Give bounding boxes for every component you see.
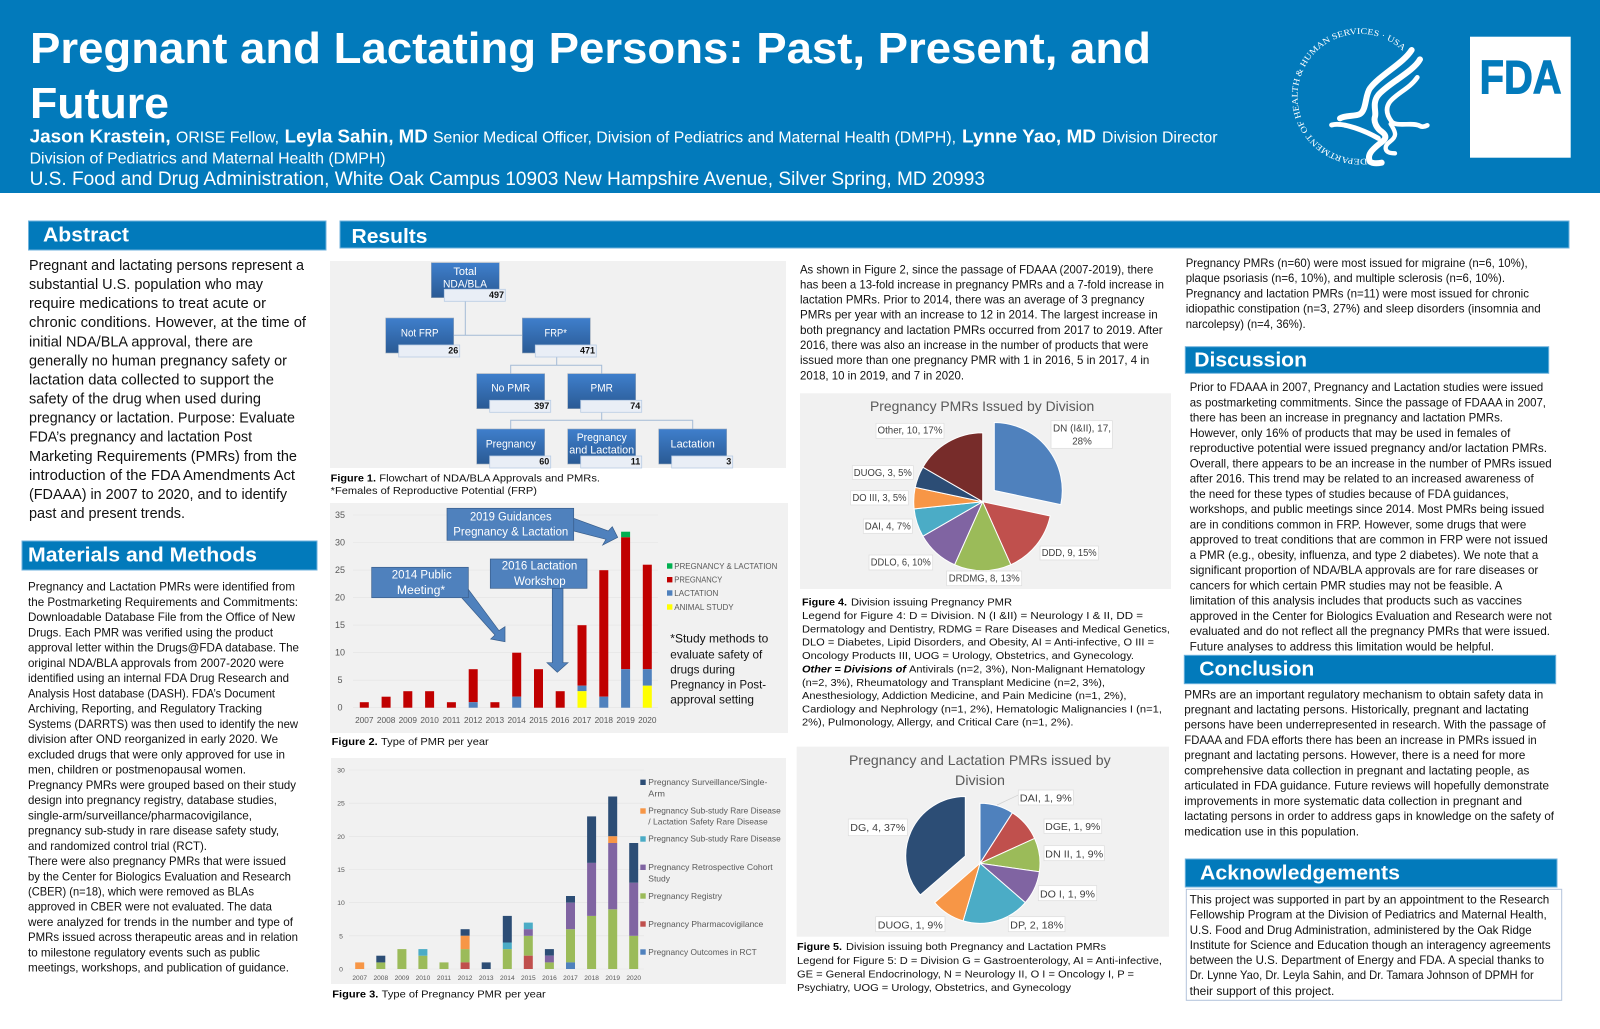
text block: results continued: Pregnancy and lactation PMRs (n=11) were most issued for chronic: [1186, 287, 1529, 300]
text block: discussion: Future analyses to address this limitation would be helpful.: [1190, 640, 1494, 653]
note: study methods: approval setting: [670, 692, 754, 706]
x axis year labels: 2009: [399, 715, 417, 725]
text block: acknowledgements: This project was supported in part by an appointment to the Research: [1190, 893, 1549, 906]
heading: Abstract: Abstract: [43, 225, 129, 247]
node: PMR 74: [568, 374, 642, 412]
authors and affiliations: U.S. Food and Drug Administration, White Oak Campus 10903 New Hampshire Avenue, Silver Spring, MD 20993: [30, 168, 985, 190]
y axis labels: 0: [339, 966, 343, 974]
node: Total NDA/BLA 497: NDA/BLA: [443, 279, 488, 291]
heading: Conclusion: Conclusion: [1199, 659, 1314, 681]
text block: materials and methods: (CBER) (n=18), which were removed as BLAs: [28, 886, 254, 898]
y axis labels: 25: [337, 801, 345, 808]
text block: abstract: require medications to treat acute or: [29, 295, 266, 312]
text block: results narrative: has been a 13-fold increase in pregnancy PMRs and a 7-fold increase in: [800, 278, 1164, 291]
note: study methods: *Study methods to: [670, 632, 769, 646]
x axis year labels: 2020: [626, 975, 641, 982]
heading: Materials and Methods: [22, 541, 317, 570]
caption: figure 4: Division issuing Pregnancy PMR: [851, 596, 1012, 608]
y axis labels: 15: [335, 620, 345, 630]
caption: figure 5: Figure 5.: [797, 941, 842, 953]
text block: results narrative: issued more than one pregnancy PMR with 1 in 2016, 5 in 2017, 4 in: [800, 354, 1149, 367]
text block: abstract: generally no human pregnancy safety or: [29, 352, 287, 369]
caption: figure 4: Anesthesiology, Addiction Medicine, and Pain Medicine (n=1, 2%),: [802, 690, 1126, 702]
text block: materials and methods: Archiving, Reporting, and Regulatory Tracking: [28, 703, 262, 716]
caption: figure 1: *Females of Reproductive Potential (FRP): [331, 485, 537, 497]
node: Not FRP 26: 26: [448, 346, 458, 356]
text block: materials and methods: meetings, workshops, and publication of guidance.: [28, 962, 289, 975]
authors and affiliations: Division of Pediatrics and Maternal Health (DMPH): [30, 150, 386, 167]
text block: conclusion: comprehensive data collection in pregnant and lactating people, as: [1184, 764, 1530, 777]
text block: discussion: reproductive potential were issued pregnancy and/or lactation PMRs.: [1190, 442, 1547, 455]
data labels: DAI, 4, 7%: [865, 522, 911, 533]
node: Pregnancy and Lactation 11: 11: [631, 457, 640, 467]
text block: acknowledgements: between the U.S. Department of Energy and FDA. A special thanks to: [1190, 954, 1544, 967]
x axis year labels: 2012: [464, 715, 483, 725]
callout: 2016 lactation workshop with arrow: Workshop: [514, 574, 566, 588]
text block: materials and methods: Pregnancy and Lactation PMRs were identified from: [28, 581, 295, 594]
legend: figure 2: [667, 561, 777, 612]
x axis year labels: 2011: [442, 715, 461, 725]
x axis year labels: 2008: [373, 975, 388, 982]
node: Lactation 3: Lactation: [671, 439, 715, 451]
data labels: DG, 4, 37%: [850, 823, 906, 834]
text block: discussion: workshops, and public meetings since 2014. Most PMRs being issued: [1189, 503, 1544, 516]
heading: Materials and Methods: Materials and Methods: [28, 545, 257, 567]
chart title: Division: [955, 772, 1005, 788]
text block: discussion: approved to treat conditions that are common in FRP were not issued: [1190, 534, 1548, 546]
node: PMR 74: PMR: [591, 383, 613, 395]
text block: results continued: plaque psoriasis (n=6, 10%), and multiple sclerosis (n=6, 10%).: [1186, 272, 1505, 285]
x axis year labels: 2011: [437, 975, 451, 982]
callout: 2016 lactation workshop with arrow: [490, 559, 587, 672]
caption: figure 4: Cardiology and Nephrology (n=1, 2%), Hematologic Malignancies I (n=1,: [802, 704, 1162, 716]
x axis year labels: 2012: [458, 975, 473, 982]
x axis year labels: 2014: [507, 715, 526, 725]
text block: conclusion: pregnant and lactating persons. Historically, pregnant and lactating: [1184, 704, 1529, 716]
text block: discussion: approved in the Center for Biologics Evaluation and Research were not: [1190, 610, 1552, 623]
callout: 2019 guidances with arrow: 2019 Guidances: [470, 510, 552, 524]
text block: acknowledgements: Institute for Science and Education though an interagency agreements: [1190, 939, 1551, 952]
caption: figure 4: (n=2, 3%), Rheumatology and Transplant Medicine (n=2, 3%),: [802, 677, 1105, 689]
node: Pregnancy 60: 60: [539, 457, 549, 467]
data labels: 28%: [1072, 436, 1092, 447]
x axis year labels: 2010: [420, 715, 439, 725]
x axis year labels: 2007: [355, 715, 374, 725]
x axis year labels: 2013: [486, 715, 505, 725]
node: Lactation 3: 3: [726, 457, 731, 467]
node: Total NDA/BLA 497: [431, 263, 505, 301]
text block: materials and methods: Systems (DARRTS) was then used to identify the new: [28, 718, 299, 731]
text block: materials and methods: approval letter within the Drugs@FDA database. The: [28, 642, 299, 655]
node: Pregnancy and Lactation 11: Pregnancy: [577, 432, 627, 444]
text block: abstract: lactation data collected to support the: [29, 372, 274, 388]
legend: figure 2: ANIMAL STUDY: [674, 602, 734, 612]
caption: figure 3: Figure 3.: [332, 989, 378, 1001]
data labels: [851, 421, 1112, 586]
text block: abstract: Marketing Requirements (PMRs) from the: [29, 448, 297, 465]
callout: 2014 public meeting with arrow: [372, 567, 505, 642]
title: Future: [30, 79, 169, 128]
legend: figure 3: Pregnancy Outcomes in RCT: [648, 947, 757, 957]
text block: abstract: FDA’s pregnancy and lactation Post: [29, 429, 253, 446]
text block: discussion: significant proportion of NDA/BLA approvals are for rare diseases or: [1190, 564, 1538, 577]
text block: materials and methods: [27, 581, 299, 975]
authors and affiliations: ORISE Fellow,: [176, 130, 279, 147]
text block: results continued: Pregnancy PMRs (n=60) were most issued for migraine (n=6, 10%),: [1186, 257, 1528, 270]
node: PMR 74: 74: [630, 401, 640, 411]
text block: discussion: as postmarketing commitments. Since the passage of FDAAA in 2007,: [1190, 396, 1546, 409]
node: Pregnancy and Lactation 11: [568, 429, 642, 468]
heading: Conclusion: [1184, 655, 1556, 684]
node: Pregnancy 60: [477, 429, 551, 468]
node: Pregnancy 60: Pregnancy: [486, 439, 536, 451]
text block: results narrative: both pregnancy and lactation PMRs occurred from 2017 to 2019. After: [800, 324, 1163, 337]
text block: conclusion: articulated in FDA guidance. Future reviews will hopefully demonstrate: [1184, 780, 1549, 793]
x axis year labels: 2009: [395, 975, 410, 982]
text block: materials and methods: original NDA/BLA approvals from 2007-2020 were: [28, 657, 284, 670]
text block: acknowledgements: [1186, 889, 1562, 1000]
icon: FDA logo: [1470, 37, 1571, 158]
authors and affiliations: Division Director: [1102, 130, 1218, 147]
text block: abstract: [29, 257, 307, 522]
caption: figure 4: Other = Divisions of: [802, 663, 908, 675]
y axis labels: 35: [335, 510, 345, 520]
x axis year labels: 2020: [638, 715, 657, 725]
authors and affiliations: Leyla Sahin, MD: [285, 127, 428, 147]
text block: results continued: narcolepsy) (n=4, 36%).: [1186, 318, 1306, 331]
icon: FDA logo: FDA: [1480, 51, 1562, 104]
text block: results narrative: lactation PMRs. Prior to 2014, there was an average of 3 pregnancy: [800, 294, 1144, 307]
data labels: DUOG, 3, 5%: [854, 468, 912, 479]
caption: figure 2: Figure 2.: [332, 736, 378, 748]
callout: 2019 guidances with arrow: Pregnancy & Lactation: [453, 525, 568, 539]
text block: results narrative: 2016, there was also an increase in the number of products that were: [800, 339, 1148, 352]
caption: figure 4: Legend for Figure 4: D = Division. N (I &II) = Neurology I & II, DD =: [802, 610, 1143, 622]
heading: Discussion: [1185, 347, 1549, 373]
title: [30, 24, 1151, 128]
x axis year labels: 2016: [551, 715, 570, 725]
text block: materials and methods: design into pregnancy registry, database studies,: [28, 794, 277, 807]
data labels: DN (I&II), 17,: [1053, 424, 1111, 435]
x axis year labels: 2014: [500, 975, 515, 982]
text block: acknowledgements: Dr. Lynne Yao, Dr. Leyla Sahin, and Dr. Tamara Johnson of DPMH for: [1190, 969, 1534, 982]
panel: figure 3 stacked bar chart: [331, 758, 786, 984]
x axis year labels: 2015: [529, 715, 548, 725]
text block: materials and methods: the Postmarketing Requirements and Commitments:: [28, 596, 298, 609]
node: Total NDA/BLA 497: 497: [489, 290, 504, 300]
y axis labels: 20: [335, 593, 345, 603]
text block: discussion: [1189, 381, 1552, 653]
caption: figure 1: [331, 473, 600, 497]
legend: figure 3: Arm: [648, 789, 665, 799]
caption: figure 2: [332, 736, 489, 748]
text block: materials and methods: to milestone regulatory events such as public: [28, 946, 260, 960]
node: FRP 471: [522, 318, 596, 357]
data labels: DRDMG, 8, 13%: [949, 574, 1020, 585]
note: study methods: evaluate safety of: [670, 648, 763, 662]
text block: discussion: after 2016. This trend may be related to an increased awareness of: [1190, 472, 1534, 486]
text block: materials and methods: Drugs. Each PMR was verified using the product: [28, 626, 274, 639]
text block: results narrative: As shown in Figure 2, since the passage of FDAAA (2007-2019), there: [800, 263, 1153, 276]
caption: figure 1: Flowchart of NDA/BLA Approvals and PMRs.: [379, 473, 600, 485]
node: Not FRP 26: [386, 318, 460, 357]
text block: materials and methods: excluded drugs that were only approved for use in: [28, 748, 285, 761]
heading: Acknowledgements: Acknowledgements: [1200, 862, 1400, 884]
x axis year labels: [352, 975, 641, 982]
heading: Abstract: [28, 221, 326, 250]
y axis labels: 25: [335, 565, 345, 575]
text block: materials and methods: identified using an internal FDA Drug Research and: [28, 672, 289, 685]
text block: acknowledgements: U.S. Food and Drug Administration, administered by the Oak Ridge: [1190, 924, 1532, 937]
caption: figure 4: DLO = Diabetes, Lipid Disorders, and Obesity, AI = Anti-infective, O III =: [802, 637, 1154, 649]
caption: figure 5: Division issuing both Pregnancy and Lactation PMRs: [846, 941, 1106, 953]
legend: figure 3: Pregnancy Registry: [648, 891, 723, 901]
chart title: [849, 752, 1111, 788]
text block: discussion: the need for these types of studies because of FDA guidances,: [1190, 488, 1509, 501]
text block: materials and methods: men, children or postmenopausal women.: [28, 764, 246, 777]
callout: 2019 guidances with arrow: [447, 508, 618, 545]
note: study methods: Pregnancy in Post-: [670, 678, 766, 692]
data labels: DAI, 1, 9%: [1020, 794, 1072, 805]
text block: materials and methods: Downloadable Database File from the Office of New: [28, 611, 296, 624]
y axis labels: 10: [335, 648, 345, 658]
x axis year labels: 2013: [479, 975, 494, 982]
text block: discussion: Prior to FDAAA in 2007, Pregnancy and Lactation studies were issued: [1190, 381, 1543, 394]
callout: 2014 public meeting with arrow: Meeting*: [397, 583, 445, 597]
pie slices: [906, 796, 1040, 923]
text block: discussion: limitation of this analysis includes that products such as vaccines: [1190, 594, 1522, 608]
chart title: Pregnancy PMRs Issued by Division: [870, 398, 1094, 414]
y axis labels: 15: [337, 867, 345, 874]
text block: results continued: [1186, 257, 1541, 331]
legend: figure 3: Pregnancy Retrospective Cohort: [648, 862, 773, 872]
data labels: DDD, 9, 15%: [1042, 548, 1097, 559]
data labels: [848, 790, 1104, 932]
x axis year labels: 2019: [616, 715, 635, 725]
text block: results narrative: PMRs per year with an increase to 12 in 2014. The largest increase in: [800, 309, 1158, 322]
y axis labels: 30: [337, 768, 345, 774]
callout: 2016 lactation workshop with arrow: 2016 Lactation: [502, 559, 577, 573]
caption: figure 3: Type of Pregnancy PMR per year: [382, 989, 546, 1001]
text block: results continued: idiopathic constipation (n=3, 27%) and sleep disorders (insomnia and: [1186, 303, 1541, 316]
legend: figure 3: Pregnancy Sub-study Rare Disease: [648, 806, 781, 816]
caption: figure 4: 2%), Pulmonology, Allergy, and Critical Care (n=1, 2%).: [802, 716, 1074, 728]
node: Pregnancy and Lactation 11: and Lactation: [569, 444, 634, 456]
y axis labels: 20: [337, 834, 345, 841]
text block: discussion: cancers for which certain PMR studies may not be feasible. A: [1190, 579, 1503, 592]
node: Total NDA/BLA 497: Total: [453, 266, 477, 278]
data labels: DUOG, 1, 9%: [878, 920, 943, 931]
legend: figure 3: Pregnancy Surveillance/Single-: [648, 777, 767, 787]
icon: HHS eagle seal: DEPARTMENT OF HEALTH & HUMAN SERVICES · USA: [1292, 28, 1404, 165]
text block: materials and methods: division after OND reorganized in early 2020. We: [28, 733, 278, 746]
text block: materials and methods: were analyzed for trends in the number and type of: [27, 916, 294, 929]
x axis year labels: 2015: [521, 975, 536, 982]
text block: conclusion: persons have been underrepresented in research. With the passage of: [1184, 719, 1546, 732]
heading: Results: [340, 221, 1569, 248]
data labels: DDLO, 6, 10%: [871, 558, 931, 569]
caption: figure 4: [802, 596, 1170, 728]
panel: figure 2 bar chart: [330, 503, 788, 733]
panel: figure 5 pie chart: [797, 747, 1169, 937]
text block: abstract: initial NDA/BLA approval, there are: [29, 333, 253, 350]
node: No PMR 397: [477, 374, 551, 412]
text block: conclusion: PMRs are an important regulatory mechanism to obtain safety data in: [1184, 688, 1543, 701]
text block: results narrative: 2018, 10 in 2019, and 7 in 2020.: [800, 369, 964, 382]
text block: discussion: are in conditions common in FRP. However, some drugs that were: [1190, 518, 1526, 531]
x axis year labels: 2017: [563, 975, 578, 982]
text block: materials and methods: and randomized control trial (RCT).: [28, 840, 207, 853]
x axis year labels: 2018: [584, 975, 599, 982]
authors and affiliations: Lynne Yao, MD: [962, 127, 1096, 147]
caption: figure 5: [797, 941, 1162, 994]
stacked bars: [360, 532, 652, 708]
y axis labels: 30: [335, 538, 345, 548]
node: FRP 471: 471: [580, 346, 595, 356]
text block: abstract: Pregnant and lactating persons represent a: [29, 257, 305, 274]
text block: materials and methods: Pregnancy PMRs were grouped based on their study: [28, 779, 296, 792]
text block: conclusion: medication use in this population.: [1184, 825, 1359, 838]
callout: 2014 public meeting with arrow: 2014 Public: [392, 568, 452, 582]
data labels: Other, 10, 17%: [878, 426, 943, 437]
legend: figure 3: [640, 777, 781, 957]
x axis year labels: 2018: [595, 715, 613, 725]
text block: abstract: introduction of the FDA Amendments Act: [29, 467, 296, 484]
data labels: DO I, 1, 9%: [1040, 889, 1095, 900]
legend: figure 3: Pregnancy Sub-study Rare Disease: [648, 834, 781, 844]
x axis year labels: 2019: [605, 975, 620, 982]
node: Not FRP 26: Not FRP: [401, 328, 439, 340]
text block: abstract: (FDAAA) in 2007 to 2020, and to identify: [29, 486, 287, 503]
caption: figure 5: GE = General Endocrinology, N = Neurology II, O I = Oncology I, P =: [797, 968, 1134, 980]
text block: conclusion: pregnant and lactating persons. However, there is a need for more: [1184, 749, 1525, 762]
text block: materials and methods: pregnancy sub-study in rare disease safety study,: [28, 824, 279, 838]
text block: abstract: pregnancy or lactation. Purpose: Evaluate: [29, 410, 295, 427]
caption: figure 2: Type of PMR per year: [381, 736, 489, 748]
caption: figure 1: Figure 1.: [331, 473, 376, 485]
caption: figure 5: Psychiatry, UOG = Urology, Obstetrics, and Gynecology: [797, 982, 1072, 994]
text block: conclusion: FDAAA and FDA efforts there has been an increase in PMRs issued in: [1184, 734, 1537, 747]
authors and affiliations: Jason Krastein,: [30, 127, 171, 147]
heading: Acknowledgements: [1185, 859, 1557, 887]
y axis labels: 5: [337, 675, 343, 685]
data labels: DO III, 3, 5%: [852, 493, 907, 504]
text block: abstract: past and present trends.: [29, 505, 185, 522]
x axis year labels: 2008: [377, 715, 396, 725]
text block: discussion: Overall, there appears to be an increase in the number of PMRs issued: [1190, 457, 1552, 470]
x axis year labels: 2017: [573, 715, 592, 725]
caption: figure 4: Oncology Products III, UOG = Urology, Obstetrics, and Gynecology.: [802, 650, 1134, 662]
text block: results narrative: [800, 263, 1164, 382]
text block: materials and methods: PMRs issued across therapeutic areas and in relation: [28, 931, 298, 944]
authors and affiliations: [30, 127, 1218, 190]
node: FRP 471: FRP*: [545, 328, 567, 340]
text block: abstract: substantial U.S. population who may: [29, 276, 263, 293]
heading: Results: Results: [352, 226, 428, 248]
node: No PMR 397: No PMR: [491, 383, 530, 395]
caption: figure 4: Figure 4.: [802, 596, 847, 608]
text block: materials and methods: approved in CBER were not evaluated. The data: [28, 901, 273, 914]
text block: materials and methods: by the Center for Biologics Evaluation and Research: [28, 870, 291, 883]
panel: figure 1 flowchart: [330, 261, 786, 468]
y axis labels: [337, 768, 345, 974]
text block: materials and methods: There were also pregnancy PMRs that were issued: [28, 855, 286, 868]
y axis labels: 5: [339, 933, 343, 940]
x axis year labels: 2007: [352, 975, 367, 982]
y axis labels: [335, 510, 345, 713]
pie slices: [914, 422, 1062, 571]
legend: figure 3: / Lactation Safety Rare Disease: [648, 817, 768, 827]
caption: figure 4: Dermatology and Dentistry, RDMG = Rare Diseases and Medical Genetics,: [802, 623, 1170, 635]
text block: discussion: a PMR (e.g., obesity, influenza, and type 2 diabetes). We note that a: [1190, 549, 1539, 562]
header banner: [0, 0, 1600, 193]
legend: figure 3: Pregnancy Pharmacovigilance: [648, 919, 764, 929]
legend: figure 3: Study: [648, 874, 671, 884]
data labels: DGE, 1, 9%: [1045, 822, 1101, 833]
panel: figure 4 pie chart: [800, 393, 1171, 589]
chart title: Pregnancy and Lactation PMRs issued by: [849, 752, 1111, 768]
text block: discussion: However, only 16% of products that may be used in females of: [1190, 427, 1511, 440]
text block: conclusion: lactating persons in order to address gaps in knowledge on the safety of: [1184, 810, 1555, 823]
text block: materials and methods: single-arm/surveillance/pharmacovigilance,: [28, 809, 252, 822]
x axis year labels: [355, 715, 657, 725]
title: Pregnant and Lactating Persons: Past, Present, and: [30, 24, 1151, 73]
stacked bars: [355, 796, 638, 969]
node: Lactation 3: [659, 429, 733, 468]
legend: figure 2: PREGNANCY: [674, 575, 723, 585]
x axis year labels: 2010: [416, 975, 431, 982]
node: No PMR 397: 397: [534, 401, 549, 411]
authors and affiliations: Senior Medical Officer, Division of Pediatrics and Maternal Health (DMPH),: [433, 130, 956, 147]
legend: figure 2: PREGNANCY & LACTATION: [674, 561, 777, 571]
text block: acknowledgements: Fellowship Program at the Division of Pediatrics and Maternal Health,: [1190, 908, 1547, 922]
text block: acknowledgements: their support of this project.: [1190, 985, 1334, 998]
text block: abstract: chronic conditions. However, at the time of: [29, 314, 307, 331]
note: study methods: [670, 632, 769, 706]
y axis labels: 10: [337, 900, 345, 907]
data labels: DN II, 1, 9%: [1045, 849, 1104, 860]
note: study methods: drugs during: [670, 662, 735, 676]
text block: discussion: there has been an increase in pregnancy and lactation PMRs.: [1190, 412, 1503, 424]
y axis labels: 0: [337, 703, 343, 713]
text block: abstract: safety of the drug when used during: [29, 391, 261, 408]
caption: figure 4: Antivirals (n=2, 3%), Non-Malignant Hematology: [909, 663, 1146, 675]
data labels: DP, 2, 18%: [1010, 920, 1064, 931]
caption: figure 5: Legend for Figure 5: D = Division G = Gastroenterology, AI = Anti-infective,: [797, 955, 1162, 967]
legend: figure 2: LACTATION: [674, 588, 718, 598]
x axis year labels: 2016: [542, 975, 557, 982]
text block: conclusion: [1184, 688, 1555, 838]
text block: conclusion: improvements in more systematic data collection in pregnant and: [1184, 795, 1522, 808]
heading: Discussion: Discussion: [1194, 350, 1307, 372]
text block: materials and methods: Analysis Host database (DASH). FDA’s Document: [28, 687, 276, 700]
text block: discussion: evaluated and do not reflect all the pregnancy PMRs that were issued.: [1190, 625, 1550, 638]
